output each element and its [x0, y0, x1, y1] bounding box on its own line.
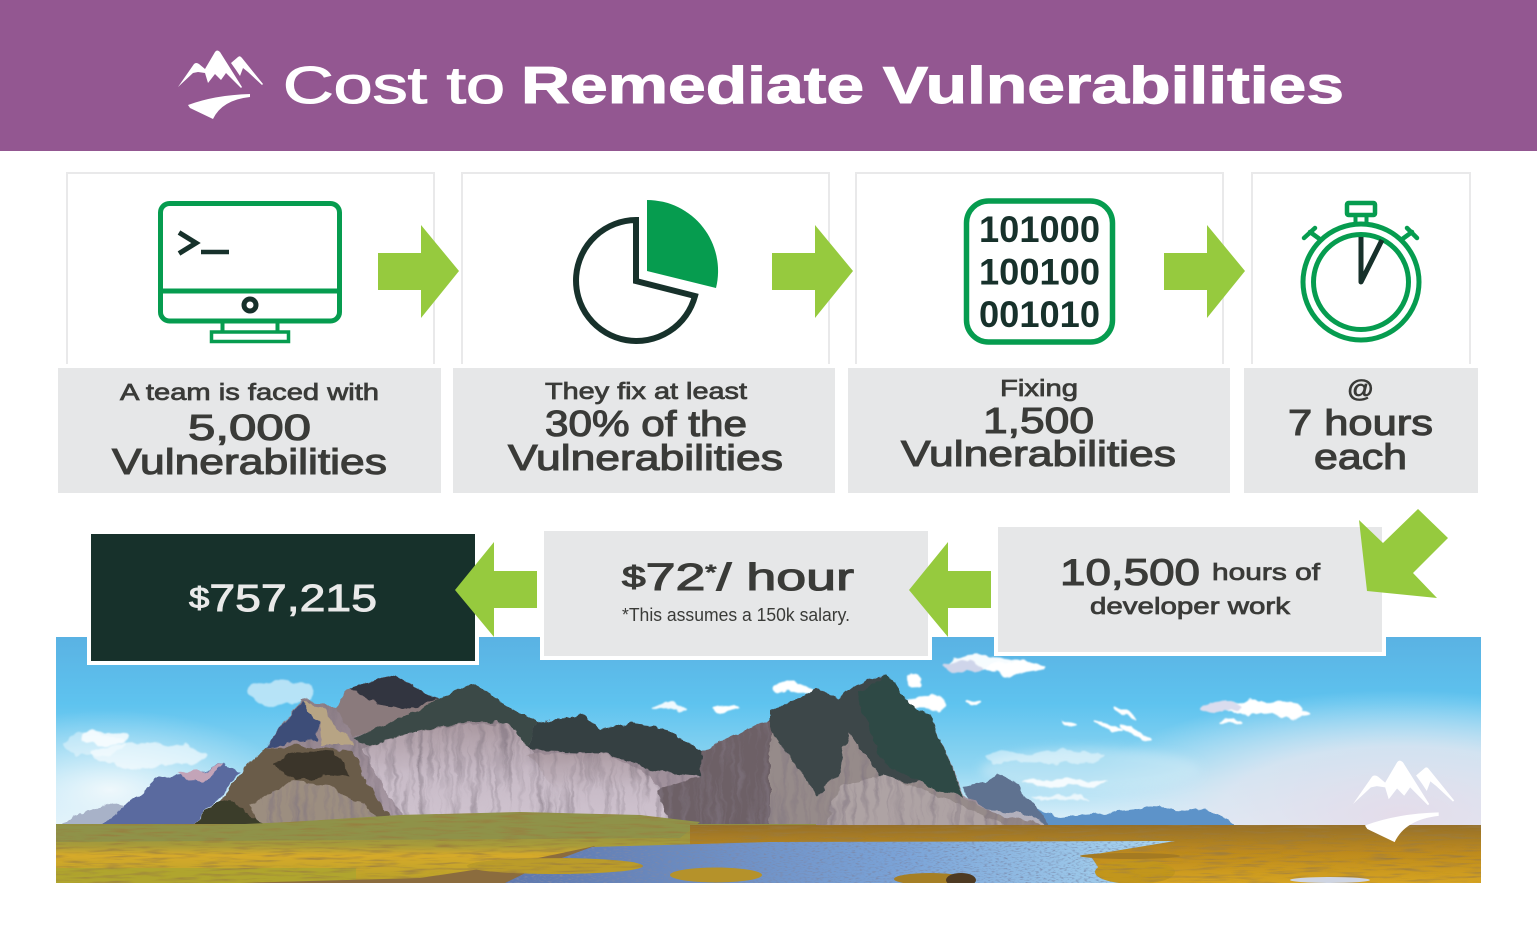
- caption box: A team is faced with: [120, 379, 379, 405]
- arrow: step 2 to step 3: [772, 225, 853, 318]
- caption box: 30% of the: [545, 403, 747, 444]
- title: Cost to: [283, 57, 505, 115]
- caption box: 5,000: [188, 407, 311, 448]
- panel: team faced with 5,000 vulnerabilities: [58, 173, 441, 493]
- panel: 7 hours each: [1244, 173, 1478, 493]
- panel: total cost: [87, 530, 479, 665]
- main mountain range: [188, 674, 1050, 828]
- landscape photo illustration: [0, 637, 1537, 937]
- arrow: hourly rate to total cost: [455, 542, 537, 637]
- icon: binary code card: 101000: [979, 209, 1100, 250]
- foreground meadow: [56, 824, 816, 884]
- icon: white mountain logo on photo: [1353, 761, 1454, 842]
- caption box: Fixing: [1000, 375, 1078, 401]
- title: [283, 57, 1344, 115]
- far mountains: [50, 764, 1247, 830]
- icon: stopwatch: [1303, 203, 1419, 340]
- panel: developer hours: hours of: [1212, 559, 1321, 585]
- caption box: 1,500: [983, 400, 1094, 441]
- header banner: [0, 0, 1537, 151]
- panel: hourly rate: [540, 527, 932, 660]
- panel: developer hours: 10,500: [1060, 552, 1200, 593]
- caption box: [1244, 368, 1478, 493]
- arrow: step 4 down to developer hours: [1359, 509, 1448, 598]
- panel: total cost: 757,215: [209, 578, 377, 620]
- panel: developer hours: developer work: [1090, 593, 1291, 619]
- panel: fix at least 30 percent: [453, 173, 835, 493]
- caption box: [453, 368, 835, 493]
- panel: fixing 1,500 vulnerabilities: [848, 173, 1230, 493]
- clouds: [65, 656, 1313, 800]
- caption box: each: [1314, 436, 1407, 477]
- caption box: Vulnerabilities: [508, 437, 783, 478]
- panel: hourly rate: 72: [646, 557, 705, 599]
- arrow: step 3 to step 4: [1164, 225, 1245, 318]
- icon: binary code card: [966, 201, 1112, 342]
- icon: mountain logo: [178, 50, 263, 119]
- caption box: Vulnerabilities: [112, 441, 387, 482]
- caption box: Vulnerabilities: [901, 433, 1176, 474]
- caption box: [848, 368, 1230, 493]
- panel: hourly rate: *: [705, 562, 717, 584]
- panel: hourly rate: *This assumes a 150k salary.: [622, 605, 850, 625]
- panel: hourly rate: / hour: [716, 557, 854, 599]
- panel: developer hours: [994, 523, 1386, 656]
- arrow: step 1 to step 2: [378, 225, 459, 318]
- caption box: 7 hours: [1288, 402, 1433, 443]
- caption box: @: [1347, 376, 1374, 403]
- icon: computer monitor with terminal prompt: [160, 204, 340, 342]
- panel: hourly rate: $: [622, 561, 646, 594]
- icon: binary code card: 001010: [979, 294, 1100, 335]
- icon: binary code card: 100100: [979, 252, 1100, 292]
- icon: pie chart: [576, 200, 718, 341]
- panel: total cost: $: [189, 582, 210, 615]
- arrow: developer hours to hourly rate: [909, 542, 991, 637]
- caption box: They fix at least: [545, 378, 748, 404]
- title: Remediate Vulnerabilities: [521, 57, 1344, 115]
- caption box: [58, 368, 441, 493]
